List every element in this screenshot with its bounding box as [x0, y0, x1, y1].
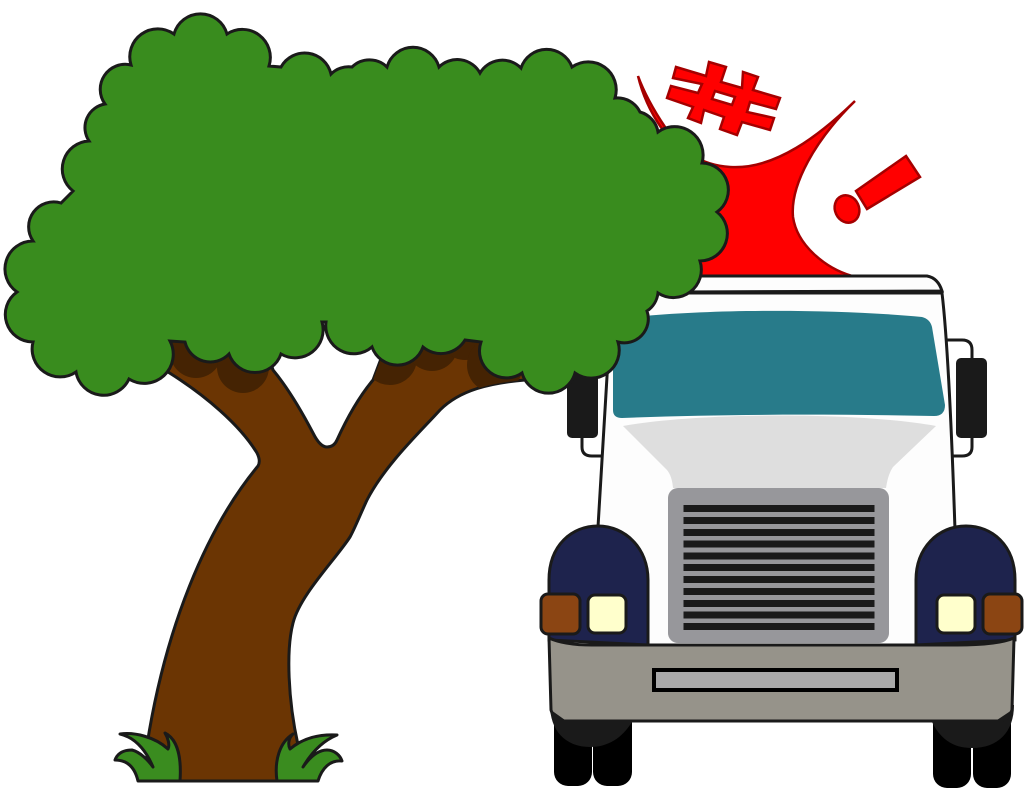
tree trunk — [147, 335, 525, 781]
mirror right — [956, 358, 987, 438]
wheels — [554, 700, 1011, 788]
orange light left — [541, 594, 580, 634]
trunk shadows under canopy — [172, 342, 521, 393]
hood — [623, 416, 936, 488]
right fender — [916, 526, 1015, 645]
yellow light right — [937, 595, 975, 633]
grass left — [115, 733, 180, 781]
icon: exclamation mark — [830, 156, 920, 227]
cab roof — [680, 276, 942, 292]
mudguards — [550, 705, 1014, 748]
yellow light left — [588, 595, 626, 633]
orange light right — [983, 594, 1022, 634]
mirror left — [567, 370, 598, 438]
truck — [541, 276, 1022, 788]
mirror arms — [582, 340, 972, 456]
grille — [668, 488, 889, 643]
icon: hash symbol — [667, 62, 780, 135]
tree canopy — [5, 14, 728, 395]
windshield — [613, 311, 945, 418]
grass right — [276, 734, 342, 781]
left fender — [549, 526, 648, 645]
bumper outline — [549, 638, 1014, 721]
bumper plate — [654, 670, 897, 690]
cab body — [597, 293, 955, 645]
bumper — [549, 638, 1014, 720]
icon: red crash burst — [638, 76, 855, 276]
